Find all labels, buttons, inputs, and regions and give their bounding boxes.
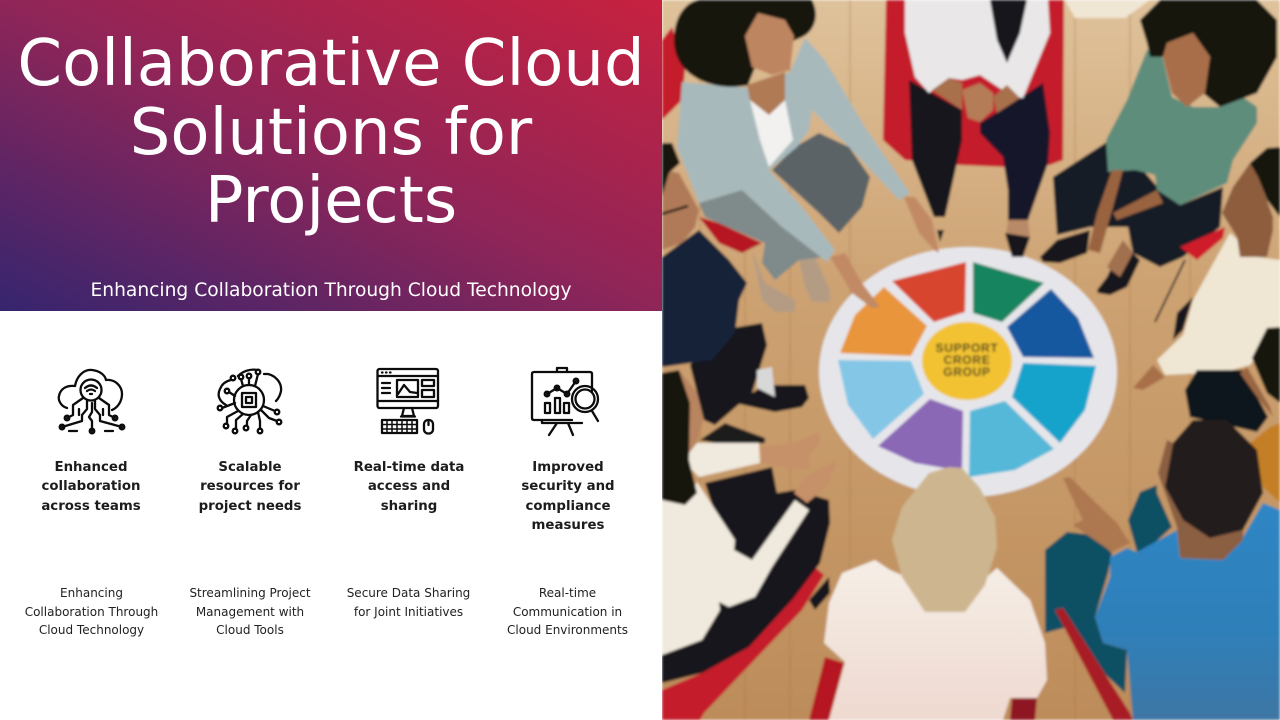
circular poster	[819, 247, 1117, 497]
circular poster: GROUP	[943, 365, 991, 379]
person: top-left in grey cardigan	[662, 0, 939, 312]
feature heading: collaboration: Enhanced collaboration across teams	[41, 460, 141, 514]
title: Collaborative Cloud	[17, 27, 645, 101]
person: far right in orange	[1185, 327, 1280, 503]
feature description 1: Enhancing Collaboration Through Cloud Technology	[25, 586, 158, 637]
title	[17, 27, 645, 238]
person: lower left in white sweater	[662, 370, 837, 720]
person: top-right in green sweater	[1040, 0, 1277, 322]
feature description 2: Streamlining Project Management with Cloud Tools	[189, 586, 311, 637]
feature heading: scalable: Scalable resources for project needs	[199, 460, 301, 514]
person: front centre blonde	[809, 467, 1047, 720]
feature description 3: Secure Data Sharing for Joint Initiatives	[347, 586, 470, 618]
feature description 4: Real-time Communication in Cloud Environments	[507, 586, 628, 637]
icon: cloud network	[58, 368, 126, 434]
title: Solutions for	[130, 96, 532, 170]
feature heading: real-time: Real-time data access and sharing	[354, 460, 464, 514]
icon: presentation board with magnifier	[530, 366, 600, 436]
circular poster: CRORE	[944, 353, 990, 367]
header banner	[0, 0, 662, 311]
poster centre label: SUPPORT	[936, 341, 998, 355]
wood floor	[662, 0, 1280, 720]
photo: team around circular poster	[662, 0, 1280, 720]
icon: desktop computer with keyboard and mouse	[376, 368, 440, 435]
person: left in navy with glasses	[662, 143, 809, 425]
title: Projects	[205, 164, 457, 238]
person: lower right in blue sweater	[1045, 420, 1280, 720]
subtitle: Enhancing Collaboration Through Cloud Technology	[90, 280, 572, 301]
person: top centre on red chair	[883, 0, 1064, 257]
person: right in cream sweater	[1133, 147, 1280, 390]
feature heading: security: Improved security and compliance measures	[521, 460, 615, 533]
icon: cloud chip	[216, 368, 282, 434]
